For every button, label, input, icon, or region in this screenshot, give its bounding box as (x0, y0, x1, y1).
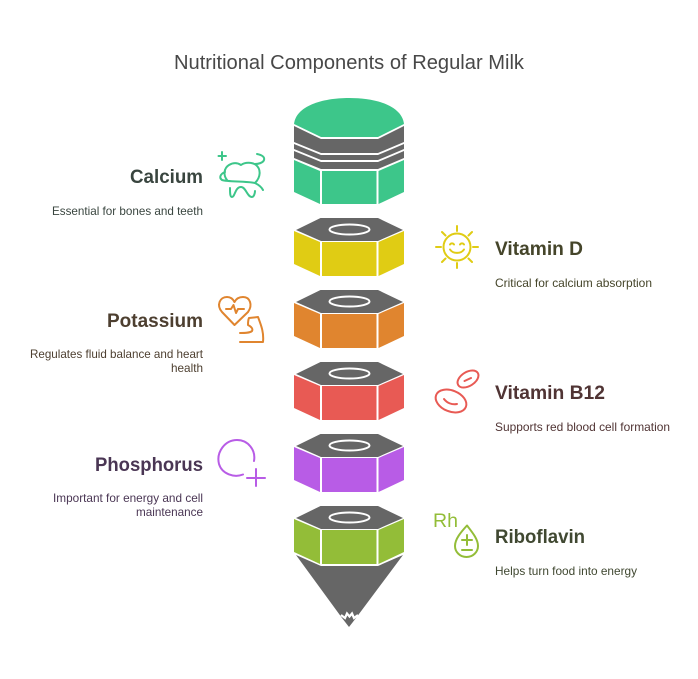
text block: Calcium (52, 167, 203, 218)
text block: Vitamin B12 (495, 383, 670, 434)
text block: Vitamin D (495, 239, 652, 290)
stack segment: purple (294, 434, 404, 492)
icon: tooth (218, 152, 264, 197)
text block: Phosphorus: Phosphorus (95, 455, 203, 476)
text block: Vitamin B12: Vitamin B12 (495, 383, 605, 404)
title: Nutritional Components of Regular Milk (174, 52, 525, 74)
icon: heart and muscle (219, 297, 263, 342)
text block: Potassium: Regulates fluid balance and heart (30, 347, 204, 361)
text block: Riboflavin: Helps turn food into energy (495, 564, 637, 578)
stack tip: gray cone (296, 555, 403, 627)
text block: Phosphorus: Important for energy and cell (53, 491, 203, 505)
text block: Vitamin D: Vitamin D (495, 239, 583, 260)
icon: Rh drop (433, 511, 478, 557)
text block: Calcium: Calcium (130, 167, 203, 188)
stack segment: green cap (294, 98, 404, 204)
text block: Riboflavin (495, 527, 637, 578)
text block: Calcium: Essential for bones and teeth (52, 204, 203, 218)
text block: Potassium: health (171, 361, 203, 375)
stack segment: lime (294, 506, 404, 564)
icon: red blood cells (432, 367, 481, 417)
stack segment: orange (294, 290, 404, 348)
stack segment: red (294, 362, 404, 420)
text block: Vitamin D: Critical for calcium absorption (495, 276, 652, 290)
text block: Riboflavin: Riboflavin (495, 527, 585, 548)
text block: Potassium (30, 311, 204, 375)
icon: Rh drop: Rh (433, 511, 458, 532)
text block: Vitamin B12: Supports red blood cell formation (495, 420, 670, 434)
stack segment: yellow (294, 218, 404, 276)
icon: sun (436, 226, 478, 268)
text block: Phosphorus (53, 455, 203, 519)
text block: Potassium: Potassium (107, 311, 203, 332)
icon: phosphorus circle plus (218, 440, 265, 486)
text block: Phosphorus: maintenance (136, 505, 203, 519)
